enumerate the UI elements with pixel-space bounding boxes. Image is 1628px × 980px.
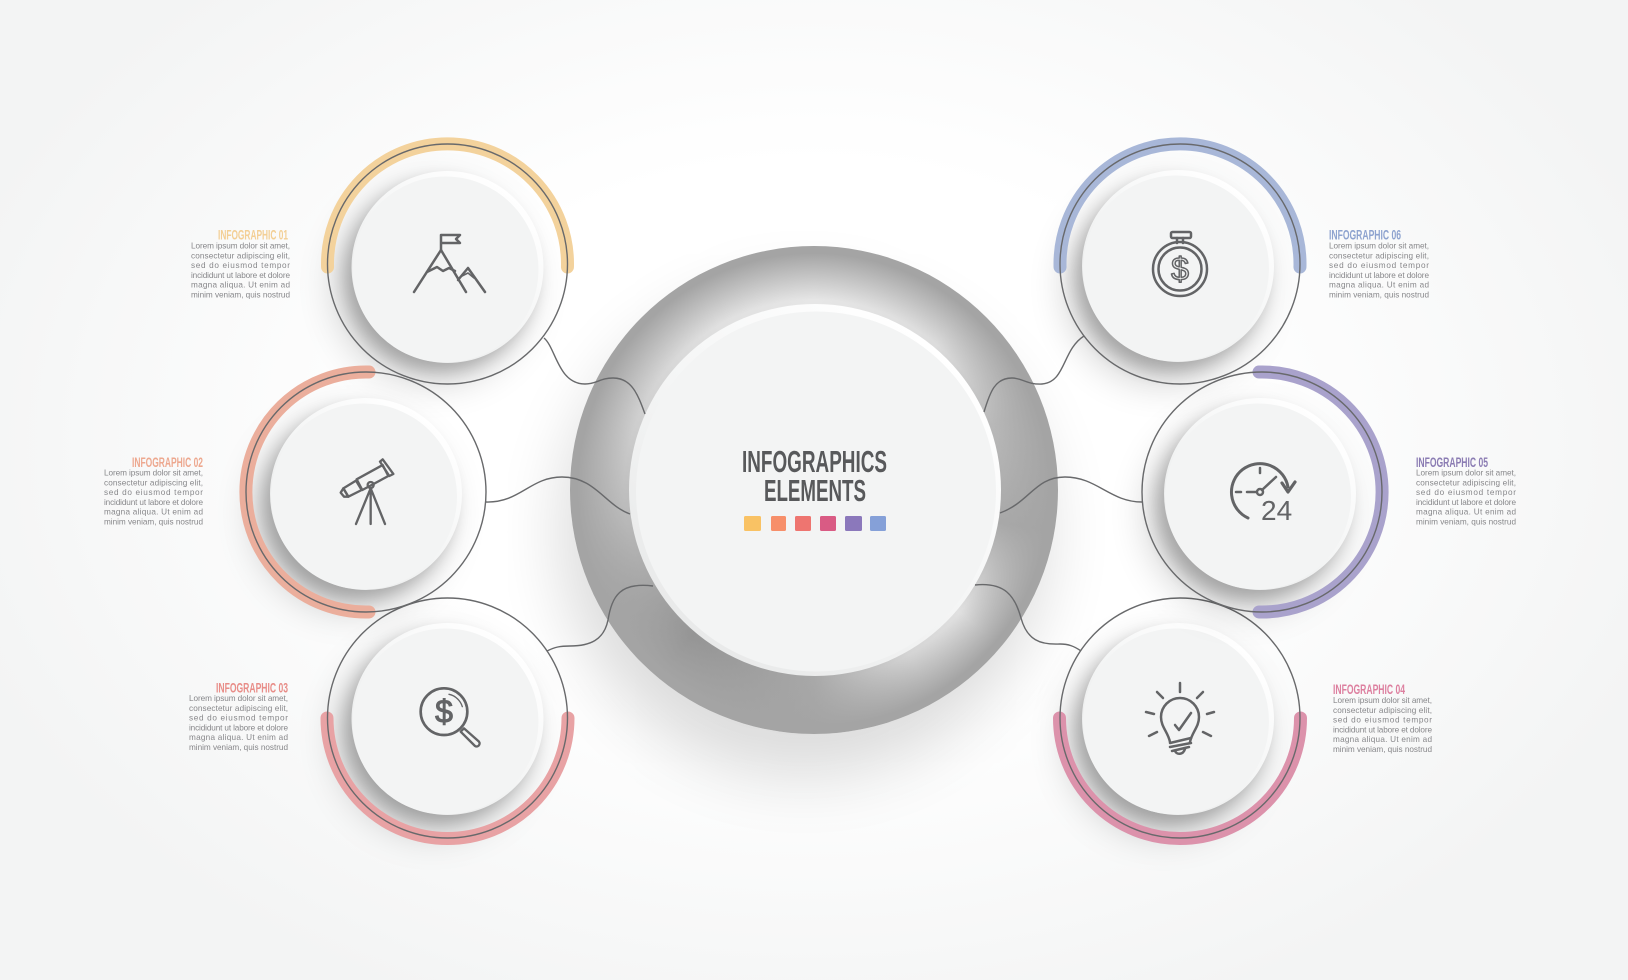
icon: 24 hour clock: 24 <box>1261 495 1292 526</box>
colour swatches <box>744 516 886 531</box>
text block: infographic 05: Lorem ipsum dolor sit amet, <box>1416 468 1516 478</box>
text block: infographic 05: sed do eiusmod tempor <box>1416 488 1516 497</box>
text block: infographic 03: magna aliqua. Ut enim ad <box>189 733 288 742</box>
text block: infographic 03: incididunt ut labore et dolore <box>189 723 288 732</box>
text block: infographic 03: Lorem ipsum dolor sit amet, <box>189 694 288 703</box>
text block: infographic 06 <box>1329 228 1429 299</box>
panel: step 1 circle <box>328 144 568 384</box>
text block: infographic 03 <box>189 680 288 752</box>
text block: infographic 04 <box>1333 682 1432 754</box>
panel: step 6 circle <box>1060 144 1300 384</box>
text block: infographic 01 <box>191 228 290 299</box>
panel: step 2 circle <box>246 372 486 612</box>
text block: infographic 04: magna aliqua. Ut enim ad <box>1333 735 1432 744</box>
text block: infographic 06: magna aliqua. Ut enim ad <box>1329 280 1429 290</box>
text block: infographic 02 <box>104 455 203 526</box>
text block: infographic 03: consectetur adipiscing elit, <box>189 704 288 713</box>
icon: mountain with flag <box>414 235 485 292</box>
text block: infographic 03: minim veniam, quis nostrud <box>189 743 288 752</box>
text block: infographic 03: INFOGRAPHIC 03 <box>216 680 288 696</box>
text block: infographic 05: magna aliqua. Ut enim ad <box>1416 508 1516 516</box>
text block: infographic 02: magna aliqua. Ut enim ad <box>104 508 203 516</box>
text block: infographic 06: Lorem ipsum dolor sit amet, <box>1329 242 1429 250</box>
text block: infographic 05: minim veniam, quis nostrud <box>1416 517 1516 526</box>
text block: infographic 01: consectetur adipiscing elit, <box>191 251 290 260</box>
text block: infographic 06: consectetur adipiscing elit, <box>1329 251 1429 260</box>
title: ELEMENTS <box>764 473 866 508</box>
panel: step 4 circle <box>1060 598 1300 839</box>
title <box>742 444 887 508</box>
text block: infographic 05: INFOGRAPHIC 05 <box>1416 455 1488 470</box>
text block: infographic 04: incididunt ut labore et dolore <box>1333 725 1432 734</box>
text block: infographic 02: consectetur adipiscing elit, <box>104 478 203 487</box>
icon: telescope <box>341 459 393 524</box>
icon: stopwatch with dollar: $ <box>1171 251 1189 287</box>
text block: infographic 02: INFOGRAPHIC 02 <box>132 455 203 470</box>
text block: infographic 06: minim veniam, quis nostrud <box>1329 290 1429 299</box>
text block: infographic 01: minim veniam, quis nostrud <box>191 290 290 299</box>
text block: infographic 01: incididunt ut labore et dolore <box>191 271 290 280</box>
text block: infographic 01: INFOGRAPHIC 01 <box>218 228 288 242</box>
central disc <box>629 304 1001 676</box>
text block: infographic 04: INFOGRAPHIC 04 <box>1333 682 1405 697</box>
text block: infographic 04: sed do eiusmod tempor <box>1333 716 1432 724</box>
icon: 24 hour clock <box>1231 464 1295 526</box>
text block: infographic 01: sed do eiusmod tempor <box>191 261 290 270</box>
title: INFOGRAPHICS <box>742 444 887 479</box>
text block: infographic 04: Lorem ipsum dolor sit amet, <box>1333 696 1432 705</box>
text block: infographic 02: incididunt ut labore et dolore <box>104 498 203 507</box>
text block: infographic 01: magna aliqua. Ut enim ad <box>191 280 290 290</box>
text block: infographic 01: Lorem ipsum dolor sit amet, <box>191 242 290 250</box>
text block: infographic 06: incididunt ut labore et dolore <box>1329 271 1429 280</box>
text block: infographic 05: incididunt ut labore et dolore <box>1416 498 1516 507</box>
text block: infographic 05: consectetur adipiscing elit, <box>1416 478 1516 487</box>
text block: infographic 06: sed do eiusmod tempor <box>1329 261 1429 270</box>
central grey ring <box>570 246 1058 734</box>
text block: infographic 05 <box>1416 455 1516 526</box>
icon: magnifier with dollar: $ <box>435 694 453 730</box>
icon: magnifier with dollar <box>421 688 480 746</box>
icon: stopwatch with dollar <box>1153 232 1207 296</box>
text block: infographic 03: sed do eiusmod tempor <box>189 714 288 722</box>
text block: infographic 04: consectetur adipiscing elit, <box>1333 706 1432 715</box>
panel: step 5 circle <box>1142 372 1382 612</box>
text block: infographic 06: INFOGRAPHIC 06 <box>1329 228 1401 242</box>
text block: infographic 02: Lorem ipsum dolor sit amet, <box>104 468 203 478</box>
text block: infographic 04: minim veniam, quis nostrud <box>1333 745 1432 754</box>
panel: step 3 circle <box>327 598 568 839</box>
text block: infographic 02: sed do eiusmod tempor <box>104 488 203 497</box>
connectors from outer circles to central disc <box>486 336 1142 651</box>
text block: infographic 02: minim veniam, quis nostrud <box>104 517 203 526</box>
icon: light bulb with check <box>1146 683 1214 754</box>
